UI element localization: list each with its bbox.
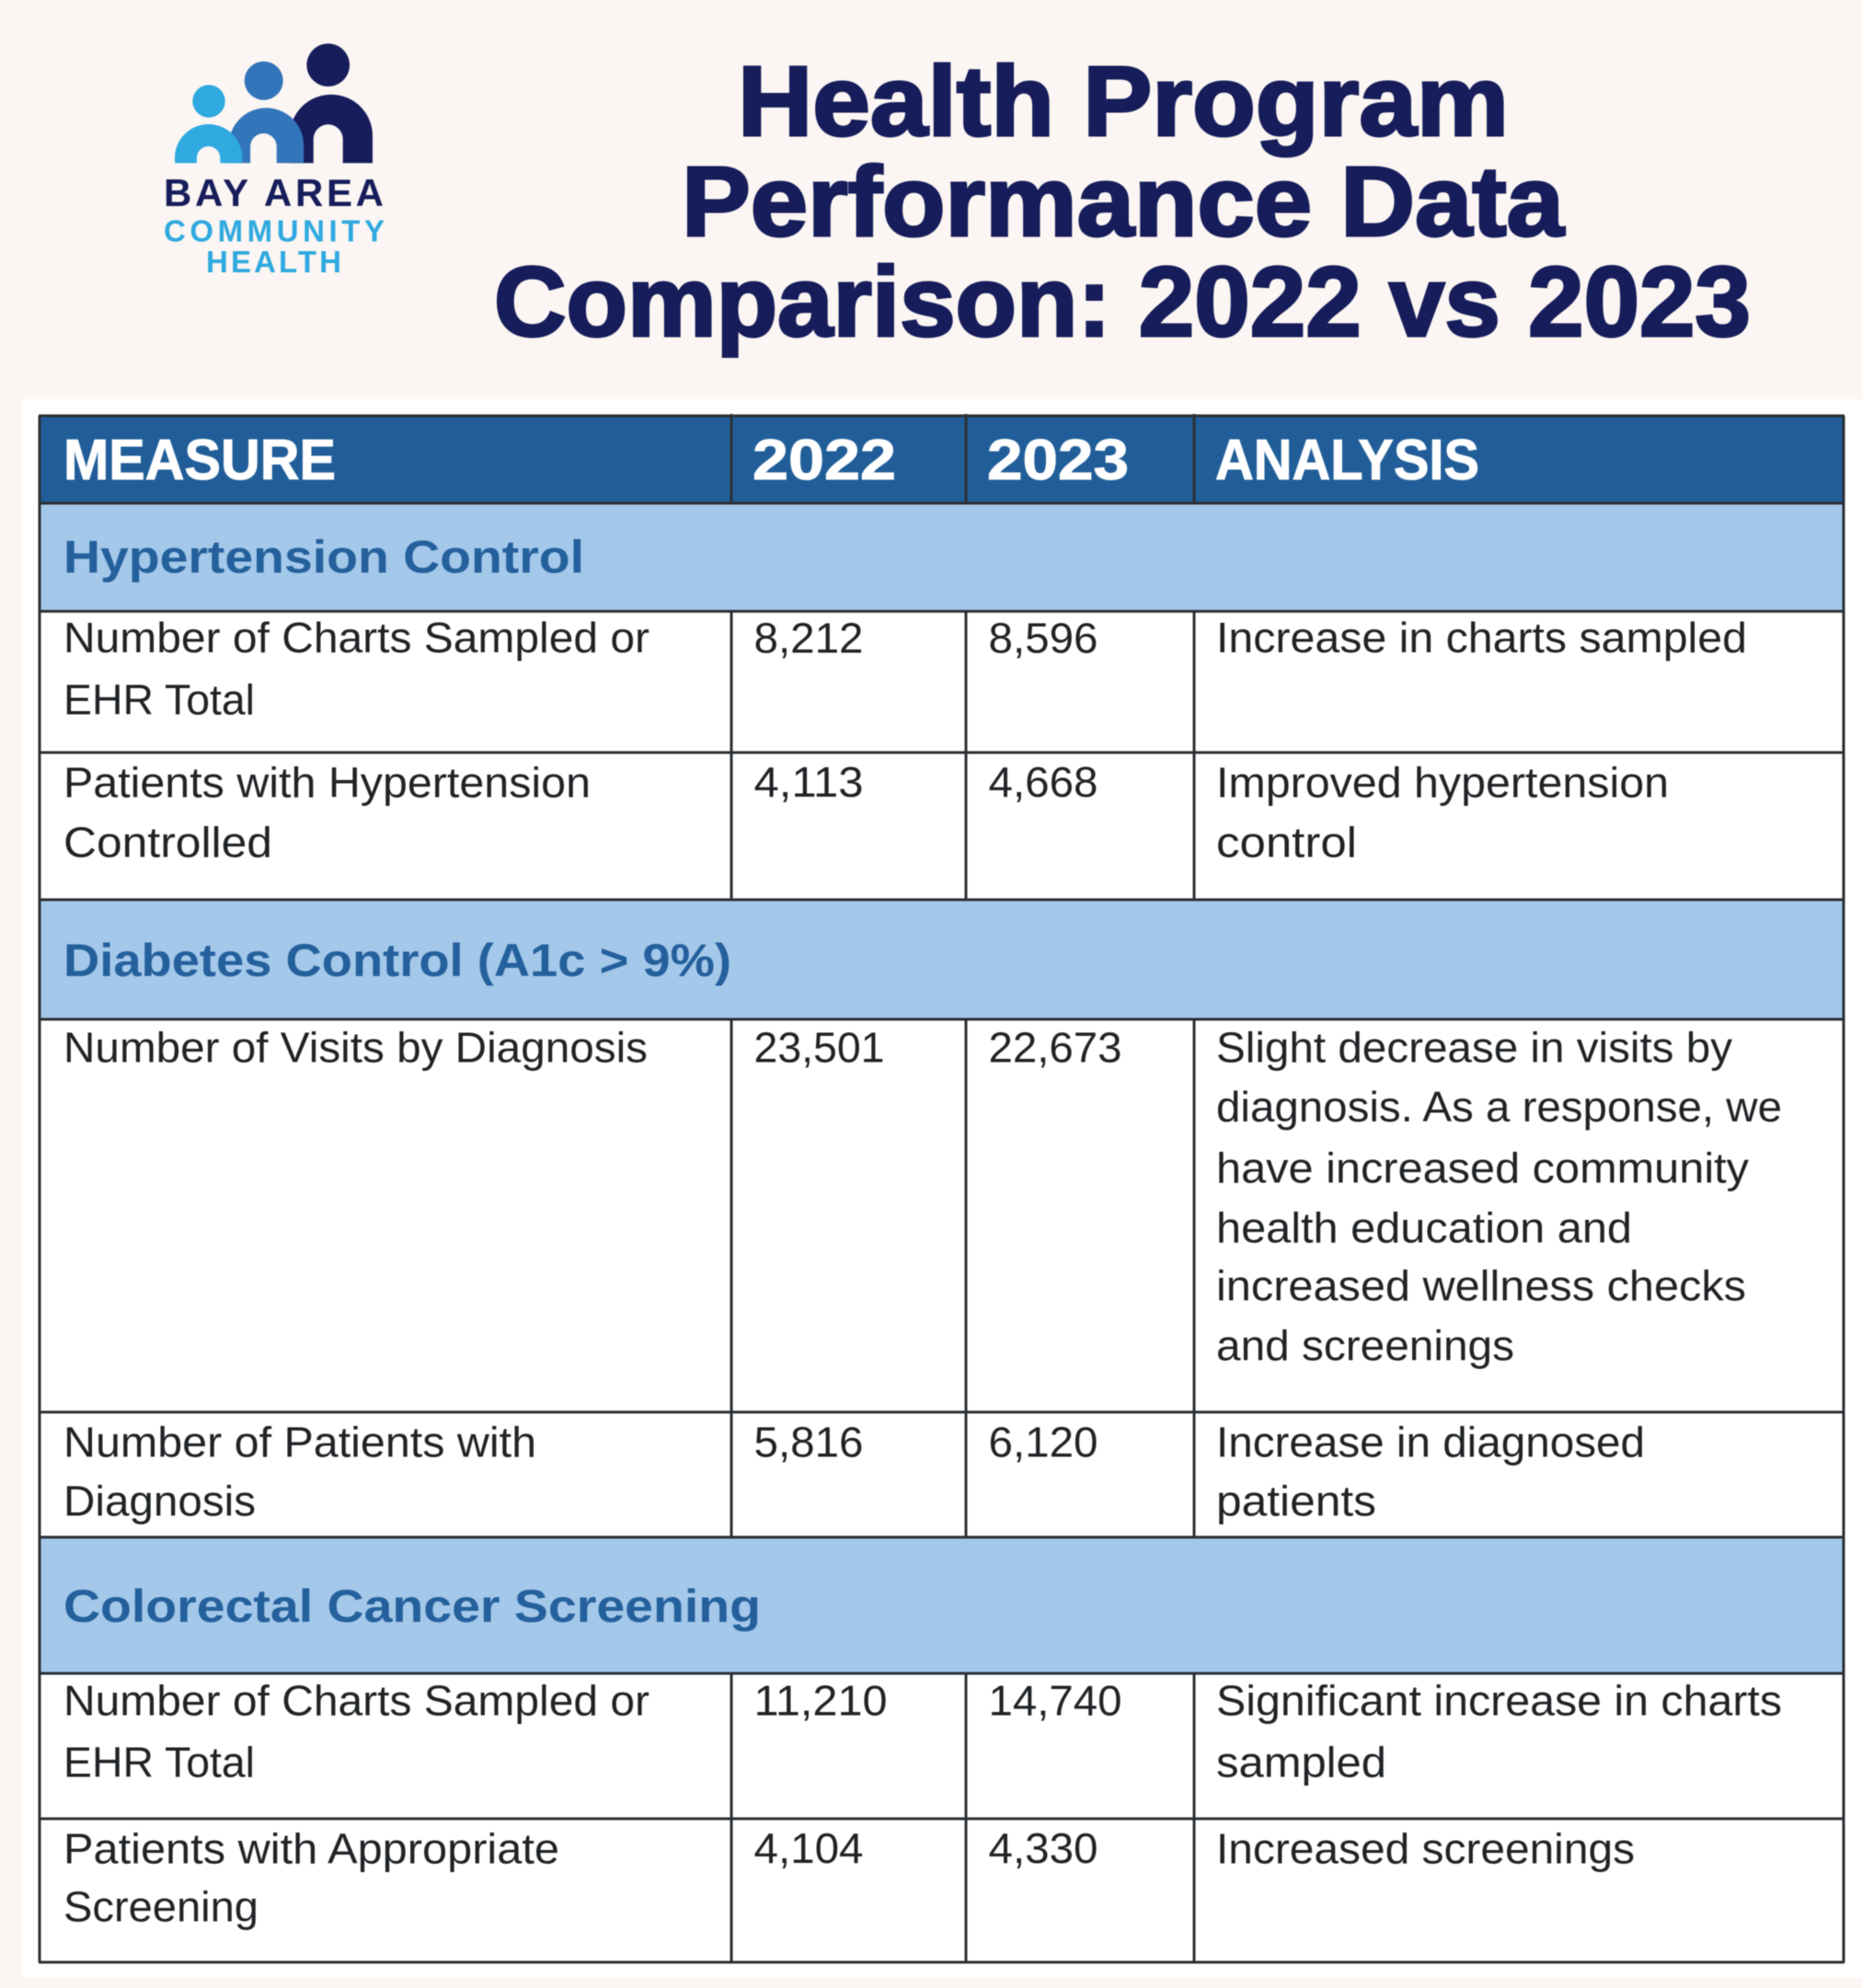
row: patients with diagnosis: Diagnosis xyxy=(63,1477,256,1525)
section heading: Colorectal Cancer Screening xyxy=(40,1537,1845,1673)
row: patients with hypertension controlled xyxy=(63,758,1669,867)
row: patients with hypertension controlled: Improved hypertension xyxy=(1216,758,1669,806)
row: visits by diagnosis: have increased community xyxy=(1216,1144,1749,1192)
row: visits by diagnosis: 22,673 xyxy=(988,1023,1122,1071)
section heading: Diabetes Control xyxy=(40,900,1845,1019)
row: patients with appropriate screening: 4,330 xyxy=(988,1824,1098,1872)
row: visits by diagnosis: Slight decrease in visits by xyxy=(1216,1023,1732,1071)
row: visits by diagnosis: health education and xyxy=(1216,1203,1632,1251)
row: hypertension charts sampled: Increase in charts sampled xyxy=(1216,614,1747,661)
logo text: Community: COMMUNITY xyxy=(164,214,385,248)
row: patients with appropriate screening: Screening xyxy=(63,1882,259,1930)
row: visits by diagnosis: and screenings xyxy=(1216,1321,1514,1369)
row: patients with diagnosis: Number of Patients with xyxy=(63,1419,536,1466)
table header row: 2023 xyxy=(987,429,1129,492)
row: patients with appropriate screening: 4,104 xyxy=(754,1824,863,1872)
row: hypertension charts sampled xyxy=(63,614,1747,723)
row: visits by diagnosis: Number of Visits by Diagnosis xyxy=(63,1023,648,1071)
section heading: Hypertension Control xyxy=(40,503,1845,611)
row: patients with diagnosis: Increase in diagnosed xyxy=(1216,1419,1645,1466)
section heading: Colorectal Cancer Screening: Colorectal Cancer Screening xyxy=(63,1580,761,1632)
row: patients with diagnosis: 6,120 xyxy=(988,1419,1098,1466)
row: patients with hypertension controlled: control xyxy=(1216,819,1357,867)
section heading: Diabetes Control: Diabetes Control (A1c > 9%) xyxy=(63,935,731,986)
row: colorectal charts sampled xyxy=(63,1676,1782,1787)
row: colorectal charts sampled: 14,740 xyxy=(988,1676,1122,1724)
panel: white table background xyxy=(22,399,1862,1978)
logo text: Health: HEALTH xyxy=(206,245,341,279)
title xyxy=(494,45,1751,357)
row: visits by diagnosis: diagnosis. As a response, we xyxy=(1216,1083,1782,1131)
row: visits by diagnosis: 23,501 xyxy=(754,1023,885,1071)
row: patients with hypertension controlled: 4,668 xyxy=(988,758,1098,806)
row: colorectal charts sampled: sampled xyxy=(1216,1739,1386,1787)
title: Performance Data xyxy=(682,145,1565,257)
table header row: 2022 xyxy=(753,429,896,492)
row: colorectal charts sampled: 11,210 xyxy=(754,1676,887,1724)
row: hypertension charts sampled: 8,596 xyxy=(988,615,1098,662)
row: visits by diagnosis: increased wellness checks xyxy=(1216,1262,1746,1310)
row: hypertension charts sampled: EHR Total xyxy=(63,675,255,723)
title: Health Program xyxy=(738,45,1509,156)
row: colorectal charts sampled: Number of Charts Sampled or xyxy=(63,1676,649,1724)
row: colorectal charts sampled: EHR Total xyxy=(63,1739,255,1787)
title: Comparison: 2022 vs 2023 xyxy=(494,246,1751,357)
row: patients with appropriate screening xyxy=(63,1824,1635,1930)
row: patients with hypertension controlled: Patients with Hypertension xyxy=(63,758,591,806)
row: visits by diagnosis xyxy=(63,1023,1782,1369)
table header row: MEASURE xyxy=(63,429,336,492)
row: patients with diagnosis: 5,816 xyxy=(754,1419,863,1466)
section heading: Hypertension Control: Hypertension Control xyxy=(63,532,584,583)
logo: Bay Area Community Health xyxy=(164,43,385,279)
row: patients with diagnosis: patients xyxy=(1216,1477,1376,1525)
table header row: ANALYSIS xyxy=(1215,429,1479,492)
table: performance data xyxy=(39,414,1845,1962)
row: patients with diagnosis xyxy=(63,1419,1645,1525)
row: patients with hypertension controlled: 4,113 xyxy=(754,758,863,806)
row: patients with appropriate screening: Increased screenings xyxy=(1216,1825,1635,1873)
table header row xyxy=(40,416,1845,503)
row: patients with appropriate screening: Patients with Appropriate xyxy=(63,1825,559,1873)
row: hypertension charts sampled: 8,212 xyxy=(754,615,863,662)
row: patients with hypertension controlled: Controlled xyxy=(63,819,272,867)
logo text: Bay Area: BAY AREA xyxy=(164,171,384,214)
row: colorectal charts sampled: Significant increase in charts xyxy=(1216,1676,1782,1724)
icon: three people xyxy=(175,43,373,163)
row: hypertension charts sampled: Number of Charts Sampled or xyxy=(63,614,649,661)
